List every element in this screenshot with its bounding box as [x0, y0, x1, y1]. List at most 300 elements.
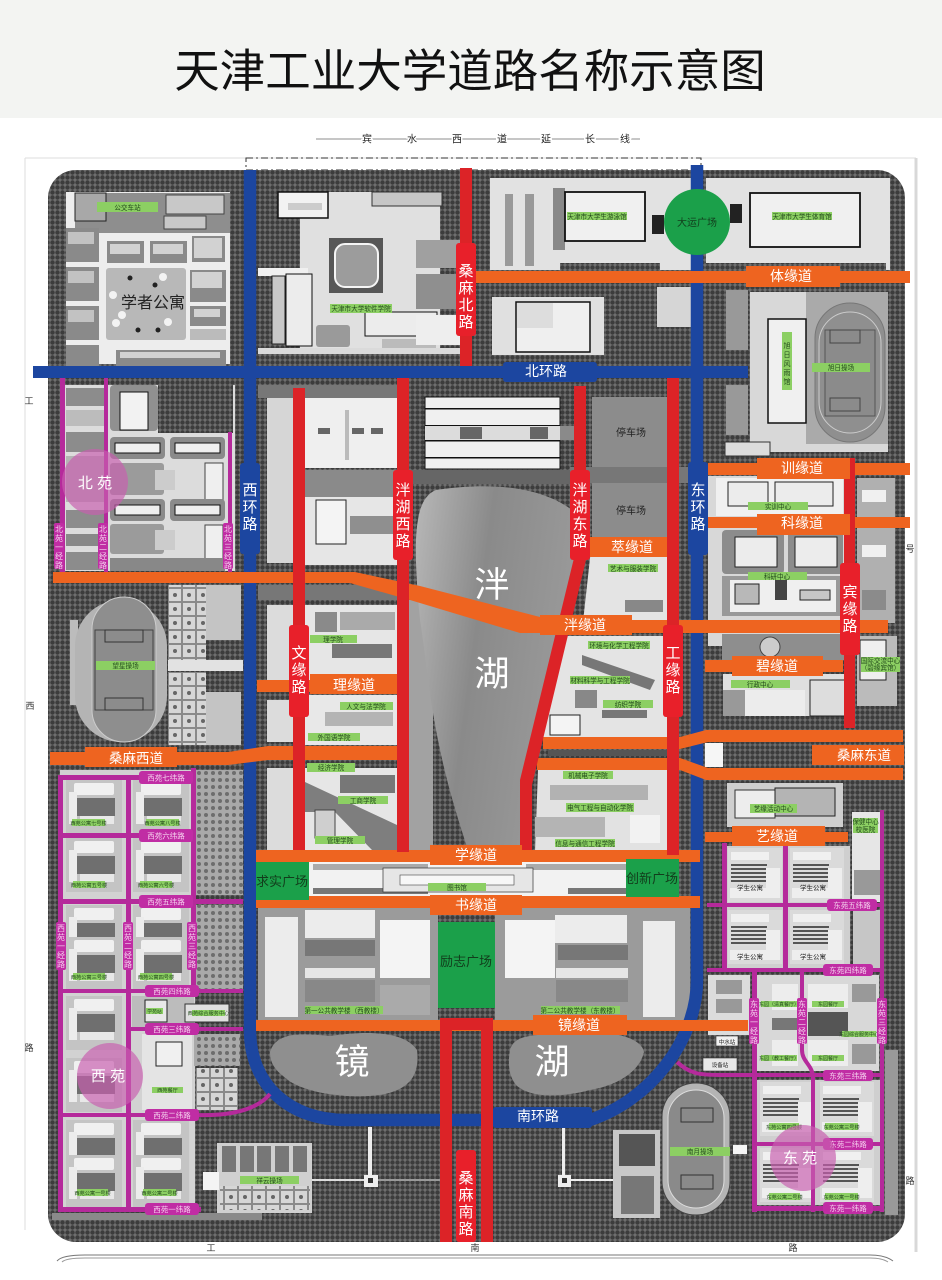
road: Jingyuan avenue line: [256, 1020, 748, 1031]
road: Panyuan avenue line: [53, 572, 888, 633]
pill: Sangma South Road: 南: [458, 1204, 474, 1221]
road: Keyuan avenue line: [708, 517, 910, 528]
pill: Panhu East Road: 湖: [572, 499, 588, 516]
panel: library belt: [309, 862, 626, 896]
road: Liyuan avenue line: [257, 680, 397, 692]
pill: Gongyuan Road: [663, 625, 683, 717]
label: arts activity center: 艺缘活动中心: [754, 804, 794, 813]
pill: Shuyuan Avenue: [430, 895, 522, 915]
dorm notes: 学生公寓: [800, 952, 826, 961]
pill: Sangma West Avenue: 桑麻西道: [109, 751, 163, 766]
pill: Beiyuan 1st: 路: [55, 560, 63, 570]
pill: Xiyuan meridian 1: 一: [57, 942, 65, 951]
pill: Panhu East Road: 泮: [572, 482, 588, 499]
pill: Xiyuan 5th: 西苑五纬路: [147, 896, 185, 906]
surrounding street labels: 路: [24, 1042, 34, 1053]
label: Xuri gym: 风: [784, 360, 790, 368]
label: Wangxing field: [96, 661, 155, 670]
pill: Dongyuan meridian 3: 苑: [878, 1008, 886, 1018]
pill: Dongyuan meridian 3: [877, 998, 887, 1045]
pill: North Ring: 北环路: [525, 363, 567, 379]
pill: Shuyuan Avenue: 书缘道: [455, 897, 497, 913]
pill: Xiyuan meridian 3: 路: [188, 959, 196, 969]
pill: Dongyuan meridian 1: 苑: [750, 1008, 758, 1018]
pill: Yiyuan Avenue: [732, 826, 825, 846]
label: Xuri gym: 馆: [784, 377, 790, 386]
label: business college: 工商学院: [350, 796, 377, 805]
label: Xiangyun field: 祥云操场: [256, 1176, 283, 1185]
pill: Biyuan Avenue: 碧缘道: [756, 658, 798, 674]
pill: Beiyuan 1st: 经: [55, 551, 63, 561]
label: Wangxing field: 望星操场: [112, 661, 139, 670]
label: west dorm building 1: 西苑公寓一号楼: [74, 1189, 111, 1197]
district badge: Dongyuan: [770, 1125, 836, 1191]
pill: Dongyuan meridian 1: 路: [750, 1035, 758, 1045]
panel: east research blocks: [705, 476, 897, 767]
district badge: Beiyuan: 北 苑: [78, 475, 112, 492]
pill: Dongyuan meridian 3: 东: [878, 999, 886, 1009]
pill: Panhu East Road: [570, 470, 590, 560]
label: library: [428, 883, 486, 892]
label: management college: [315, 836, 365, 845]
road: Biyuan avenue line: [705, 660, 843, 672]
panel: south east courts: [613, 1130, 660, 1218]
label: west dorm building 4: 西苑公寓四号楼: [138, 973, 174, 981]
block: sports buildings north: [490, 178, 890, 271]
panel: west teaching building: [258, 908, 438, 1020]
surrounding street labels: 路: [788, 1242, 798, 1253]
road: north ring line: [33, 366, 748, 378]
pill: Jingyuan Avenue: [533, 1015, 627, 1035]
pill: Xiyuan meridian 2: 西: [124, 924, 132, 933]
plaza: Dayun: 大运广场: [677, 216, 717, 229]
label: training center: [748, 502, 808, 511]
road: Panhu west line: [397, 378, 409, 852]
pill: West Ring: 环: [242, 499, 258, 516]
white paths south: [312, 1127, 613, 1187]
label: west dorm building 6: 西苑公寓六号楼: [138, 881, 174, 889]
pill: Liyuan Avenue: 理缘道: [333, 677, 375, 693]
label: west dorm building 3: 西苑公寓三号楼: [71, 973, 107, 981]
pill: Beiyuan 3rd: 经: [224, 551, 232, 561]
block: software college: [258, 192, 460, 354]
pill: Dongyuan 5th: 东苑五纬路: [833, 900, 871, 910]
pill: Xiyuan 6th: [139, 829, 193, 842]
label: Xuri gym: 雨: [784, 369, 790, 377]
district badge: Beiyuan: [62, 449, 128, 515]
pill: East Ring: 路: [690, 516, 706, 533]
block: north teaching building: [492, 287, 691, 355]
road: Panhu east line: [520, 386, 586, 850]
label: second public teaching building: 第二公共教学楼（东教楼）: [540, 1006, 620, 1015]
pill: Sangma East Avenue: 桑麻东道: [837, 748, 891, 763]
pill: Panhu West Road: 路: [395, 533, 411, 550]
panel: west campus dorms: [60, 770, 243, 1210]
pill: Dongyuan 5th: [827, 899, 877, 911]
panel: central academic blocks: [258, 585, 433, 850]
pill: Xiyuan meridian 3: 西: [188, 924, 196, 933]
district badge: Dongyuan: 东 苑: [783, 1150, 817, 1167]
label: humanities college: 人文与法学院: [346, 702, 386, 711]
panel: north campus dorms: [65, 385, 235, 571]
lake text: Pan: 泮: [474, 566, 510, 605]
label: materials college: 材料科学与工程学院: [570, 676, 630, 685]
lake text: Hu: 湖: [474, 655, 510, 694]
panel: central north teaching blocks: [258, 385, 599, 565]
pill: Panhu West Road: 泮: [395, 482, 411, 499]
road: Sangma north line: [460, 168, 472, 366]
label: Xuri gym: 旭: [784, 341, 790, 350]
title: 天津工业大学道路名称示意图: [174, 46, 766, 97]
label: environment and chemistry college: 环境与化学工程学院: [589, 641, 649, 650]
label: foreign language college: 外国语学院: [318, 733, 351, 742]
pill: Cuiyuan Avenue: 萃缘道: [611, 539, 653, 555]
label: art and fashion college: 艺术与服装学院: [610, 564, 656, 573]
road: Gongyuan line: [667, 378, 679, 855]
plaza: Lizhi: [438, 922, 495, 1008]
pill: Xiyuan meridian 2: 二: [124, 942, 132, 951]
pill: Cuiyuan Avenue: [590, 537, 667, 557]
pill: Panyuan Avenue: [540, 615, 632, 635]
label: information college: 信息与通信工程学院: [555, 839, 615, 848]
pill: Xiyuan meridian 1: [56, 922, 66, 970]
title band: [0, 0, 942, 118]
pill: Dongyuan meridian 1: [749, 998, 759, 1045]
label: first public teaching building: 第一公共教学楼（西教楼）: [304, 1006, 384, 1015]
label: administration center: 行政中心: [747, 680, 774, 689]
label: Nanyue field: 南月操场: [687, 1147, 714, 1156]
pill: Sangma North Road: 路: [458, 314, 474, 331]
pill: Beiyuan 3rd: 路: [224, 560, 232, 570]
pill: East Ring: 东: [690, 482, 706, 499]
dorm notes: 学生公寓: [737, 883, 763, 892]
label: economics college: 经济学院: [318, 763, 345, 772]
label: administration center: [731, 680, 790, 689]
surrounding street labels: 号: [905, 544, 915, 554]
pill: Beiyuan 1st: 苑: [55, 533, 63, 543]
panel: parking lots: [570, 397, 692, 537]
pill: Dongyuan meridian 3: 路: [878, 1035, 886, 1045]
pill: Wenyuan Road: 文: [291, 645, 307, 662]
dorm notes: 学生公寓: [800, 883, 826, 892]
pill: South Ring: [493, 1107, 592, 1128]
panel: Wangxing sports field: [70, 585, 243, 745]
panel: east campus dorms: 设备站: [712, 1061, 729, 1069]
east campus roads: [677, 810, 887, 1214]
label: east canteen north: 东园（清真餐厅）: [759, 1001, 799, 1008]
pill: East Ring: [688, 462, 708, 555]
pill: Sangma North Road: 麻: [458, 280, 474, 297]
pill: Tiyuan Avenue: 体缘道: [770, 268, 812, 284]
pill: Sangma South Road: 路: [458, 1221, 474, 1238]
label: international exchange center: 国际交流中心: [861, 656, 901, 665]
pill: Sangma South Road: 桑: [458, 1170, 474, 1187]
label: arts activity center: [750, 804, 797, 813]
label: economics college: [307, 763, 355, 772]
panel: east campus dorms: [703, 846, 881, 1205]
label: textile college: 纺织学院: [615, 700, 642, 709]
plaza: Chuangxin: 创新广场: [626, 871, 678, 886]
pill: Dongyuan meridian 2: 路: [798, 1035, 806, 1045]
pill: Xiyuan 7th: [139, 771, 193, 784]
label: Xuri field: 旭日操场: [828, 363, 855, 372]
pill: South Ring: 南环路: [517, 1108, 559, 1124]
pill: Xiyuan 4th: 西苑四纬路: [153, 986, 191, 996]
pill: Xiyuan 1st: [145, 1203, 199, 1215]
north campus roads: [54, 378, 233, 572]
label: west service center: 西苑综合服务中心: [188, 1009, 229, 1017]
label: science college: 理学院: [323, 635, 343, 644]
pill: Tiyuan Avenue: [746, 266, 840, 287]
label: west dorm building 7: 西苑公寓七号楼: [70, 819, 107, 827]
plaza: Lizhi: 励志广场: [440, 954, 492, 969]
pill: Panhu West Road: 湖: [395, 499, 411, 516]
label: west dorm building 8: 西苑公寓八号楼: [144, 819, 181, 827]
pill: Binyuan Road: 缘: [842, 601, 858, 618]
pill: North Ring: [503, 362, 597, 382]
panel: parking lots: 停车场: [616, 504, 646, 517]
pill: Sangma South Road: [456, 1150, 476, 1242]
panel: east academic blocks: [535, 540, 668, 852]
lake: Jinghu east: [509, 1033, 644, 1095]
pill: Panhu West Road: [393, 470, 413, 560]
label: west canteen: 西苑餐厅: [157, 1086, 178, 1094]
pill: Gongyuan Road: 路: [665, 679, 681, 696]
pill: Dongyuan 3rd: [823, 1070, 873, 1081]
pill: Wenyuan Road: 缘: [291, 662, 307, 679]
campus ground with trees: [48, 170, 905, 1242]
pill: Dongyuan 3rd: 东苑三纬路: [829, 1070, 867, 1080]
pill: Dongyuan 4th: [823, 964, 873, 976]
lake text: Hu east: 湖: [534, 1043, 570, 1082]
pill: Binyuan Road: [840, 563, 860, 655]
pill: Xiyuan meridian 2: 经: [124, 950, 132, 960]
pill: Beiyuan 2nd: 路: [99, 560, 107, 570]
south service band: [52, 1050, 898, 1220]
label: library: 图书馆: [447, 883, 467, 892]
pill: Binyuan Road: 路: [842, 618, 858, 635]
pill: Xunyuan Avenue: [757, 458, 850, 479]
pill: Liyuan Avenue: [310, 674, 397, 694]
pill: Dongyuan meridian 1: 一: [750, 1018, 758, 1027]
pill: Sangma North Road: 北: [458, 297, 474, 314]
road: Binyuan line: [844, 458, 855, 728]
pill: Dongyuan meridian 1: 经: [750, 1026, 758, 1036]
pill: Panhu East Road: 东: [572, 516, 588, 533]
label: Xuri gym: 日: [784, 351, 790, 359]
label: software college: 天津市大学软件学院: [331, 304, 391, 313]
pill: Gongyuan Road: 缘: [665, 662, 681, 679]
pill: Xiyuan 2nd: [145, 1109, 199, 1121]
pill: Panhu West Road: 西: [395, 516, 411, 533]
pill: Xiyuan 3rd: 西苑三纬路: [153, 1024, 191, 1034]
label: research center: 科研中心: [764, 572, 791, 581]
label: supermarket: [146, 1008, 163, 1015]
pill: Sangma West Avenue: [85, 747, 177, 767]
plaza: Qiushi: [256, 862, 309, 900]
pill: Yiyuan Avenue: 艺缘道: [756, 828, 798, 844]
label: swimming hall: 天津市大学生游泳馆: [567, 212, 627, 221]
pill: Dongyuan meridian 3: 经: [878, 1026, 886, 1036]
pill: Panhu East Road: 路: [572, 533, 588, 550]
label: research center: [748, 572, 807, 581]
pill: Jingyuan Avenue: 镜缘道: [558, 1017, 600, 1033]
pill: Dongyuan meridian 2: 苑: [798, 1008, 806, 1018]
road: west ring to south ring to east ring (blue): [250, 165, 697, 1120]
pill: Sangma North Road: [456, 243, 476, 336]
label: clinic: 保健中心: [852, 817, 879, 826]
label: textile college: [603, 700, 653, 709]
road: Yiyuan avenue line: [705, 832, 848, 842]
pill: Sangma East Avenue: [812, 745, 904, 765]
pill: Xiyuan meridian 3: 苑: [188, 932, 196, 942]
label: science college: [310, 635, 357, 644]
pill: Beiyuan 3rd: 三: [224, 543, 232, 552]
label: east dorm building 3: 东苑公寓三号楼: [823, 1123, 860, 1131]
pill: East Ring: 环: [690, 499, 706, 516]
label: international exchange center: [861, 656, 901, 672]
lake: Panhu: [416, 486, 578, 850]
road: Sangma west avenue line: [50, 746, 397, 765]
label: east service center: 东园综合服务中心: [839, 1031, 879, 1038]
pill: Dongyuan meridian 1: 东: [750, 999, 758, 1009]
label: training center: 实训中心: [765, 502, 792, 511]
label: east dorm building 4: 东苑公寓四号楼: [766, 1123, 802, 1131]
label: international exchange center: （碧缘宾馆）: [861, 663, 900, 672]
label: east canteen south: 东园餐厅: [818, 1055, 838, 1062]
pill: Beiyuan 2nd: 北: [99, 525, 107, 534]
pill: Xiyuan 6th: 西苑六纬路: [147, 830, 185, 840]
label: clinic: 校医院: [856, 825, 876, 834]
road: Xueyuan avenue line: [256, 850, 700, 862]
panel: arts center and clinic: [727, 783, 882, 902]
label: Xuri field: [812, 363, 870, 372]
label: east dorm building 1: 东苑公寓一号楼: [823, 1193, 860, 1201]
pill: Dongyuan 1st: [823, 1202, 873, 1214]
plaza: Qiushi: 求实广场: [256, 874, 308, 889]
surrounding street labels: 路: [905, 1175, 915, 1186]
pill: Dongyuan meridian 2: 二: [798, 1018, 806, 1027]
district badge: Xiyuan: [77, 1043, 143, 1109]
pill: Xueyuan Avenue: [430, 845, 522, 865]
pill: Dongyuan 4th: 东苑四纬路: [829, 965, 867, 975]
pill: Keyuan Avenue: [757, 514, 850, 535]
pill: Beiyuan 1st: 北: [55, 525, 63, 534]
pill: Xiyuan 1st: 西苑一纬路: [153, 1204, 191, 1214]
pill: Beiyuan 3rd: 苑: [224, 533, 232, 543]
panel: Nanyue sports field: [662, 1083, 747, 1215]
pill: Dongyuan 2nd: [823, 1138, 873, 1150]
pill: Sangma South Road: 麻: [458, 1187, 474, 1204]
pill: Gongyuan Road: 工: [665, 645, 681, 662]
road: Wenyuan line: [293, 388, 305, 850]
road: Xunyuan avenue line: [708, 463, 910, 475]
road: Shuyuan avenue line: [256, 896, 700, 908]
pill: Beiyuan 1st: [54, 523, 64, 570]
surrounding street labels: [24, 396, 915, 1253]
plaza: Chuangxin: [626, 859, 679, 897]
label: scholar apartments: 学者公寓: [121, 294, 185, 312]
pill: Xiyuan 4th: [145, 985, 199, 997]
pill: Wenyuan Road: 路: [291, 679, 307, 696]
pill: Xiyuan meridian 2: [123, 922, 133, 970]
panel: east campus dorms: 中水站: [719, 1038, 736, 1046]
pill: Beiyuan 3rd: 北: [224, 525, 232, 534]
pill: Xiyuan meridian 1: 路: [57, 959, 65, 969]
label: electrical college: 电气工程与自动化学院: [567, 803, 633, 812]
label: bus station: 公交车站: [114, 203, 141, 212]
label: east canteen: 东园餐厅: [818, 1001, 838, 1008]
pill: West Ring: 路: [242, 516, 258, 533]
label: foreign language college: [308, 733, 360, 742]
pill: Xueyuan Avenue: 学缘道: [455, 847, 497, 863]
road: Tiyuan avenue line: [476, 271, 910, 283]
pill: Dongyuan meridian 2: 经: [798, 1026, 806, 1036]
label: Xuri gym: [782, 332, 792, 390]
pill: Xiyuan 3rd: [145, 1023, 199, 1035]
surrounding street labels: 西: [25, 701, 35, 711]
pill: Dongyuan 1st: 东苑一纬路: [829, 1203, 867, 1213]
label: east dorm building 2: 东苑公寓二号楼: [766, 1193, 803, 1201]
pill: West Ring: 西: [242, 482, 258, 499]
pill: Panyuan Avenue: 泮缘道: [564, 617, 606, 633]
pill: Dongyuan 2nd: 东苑二纬路: [829, 1139, 867, 1149]
pill: Dongyuan meridian 3: 三: [878, 1018, 886, 1027]
pill: Sangma North Road: 桑: [458, 263, 474, 280]
dorm notes: 学生公寓: [737, 952, 763, 961]
panel: Xiangyun sports courts: [203, 1143, 312, 1213]
label: east canteen south: [812, 1055, 844, 1062]
pill: West Ring: [240, 463, 260, 554]
district badge: Xiyuan: 西 苑: [91, 1068, 125, 1085]
label: management college: 管理学院: [327, 836, 354, 845]
label: supermarket: 学苑站: [147, 1008, 162, 1015]
pill: Xiyuan meridian 3: 经: [188, 950, 196, 960]
pill: Xiyuan 7th: 西苑七纬路: [147, 772, 185, 782]
pill: Xiyuan meridian 1: 经: [57, 950, 65, 960]
pill: Xiyuan meridian 3: 三: [188, 942, 196, 951]
label: clinic: [852, 817, 879, 834]
surrounding street labels: 南: [470, 1242, 480, 1253]
pill: Binyuan Road: 宾: [842, 584, 858, 601]
top boundary road note: 宾水西道延长线: [362, 132, 630, 146]
label: business college: [338, 796, 388, 805]
pill: Beiyuan 2nd: [98, 523, 108, 570]
label: gymnasium: 天津市大学生体育馆: [772, 212, 832, 221]
label: humanities college: [340, 702, 393, 711]
label: east canteen: [812, 1001, 844, 1008]
pill: Xiyuan meridian 3: [187, 922, 197, 970]
label: mechanical college: [563, 771, 613, 780]
label: west dorm building 2: 西苑公寓二号楼: [141, 1189, 178, 1197]
label: mechanical college: 机械电子学院: [568, 771, 608, 780]
surrounding street labels: 工: [24, 396, 34, 406]
plaza: Dayun: [664, 189, 730, 255]
pill: Beiyuan 3rd: [223, 523, 233, 570]
panel: parking lots: 停车场: [616, 426, 646, 439]
pill: Keyuan Avenue: 科缘道: [781, 515, 823, 531]
pill: Xiyuan meridian 2: 苑: [124, 932, 132, 942]
block: scholar apartments: [66, 192, 230, 366]
pill: Xiyuan meridian 1: 苑: [57, 932, 65, 942]
road: Sangma east avenue lines: [537, 730, 903, 780]
pill: Beiyuan 1st: 一: [55, 543, 63, 552]
pill: Xunyuan Avenue: 训缘道: [781, 460, 823, 476]
label: east canteen south west: 东园（教工餐厅）: [759, 1055, 799, 1062]
pill: Xiyuan 2nd: 西苑二纬路: [153, 1110, 191, 1120]
west campus roads: [56, 768, 270, 1215]
road: Sangma south fork: [440, 1018, 493, 1242]
